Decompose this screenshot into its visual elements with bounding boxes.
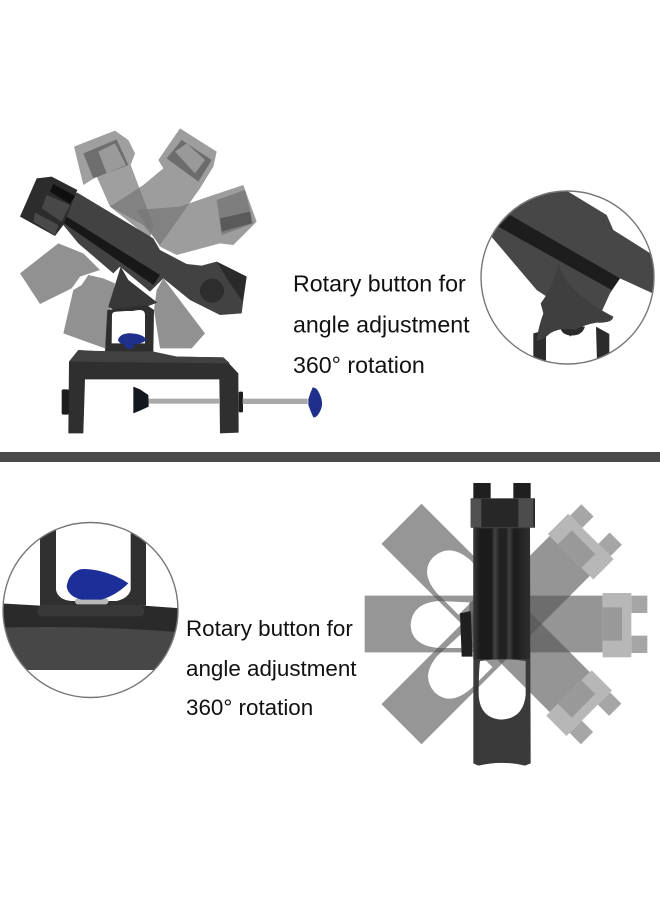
figure: tube rotating — [365, 483, 647, 766]
ghost tubes — [365, 502, 647, 748]
caption: bottom — [186, 616, 357, 720]
ghost arms: rotation positions — [20, 128, 257, 348]
caption: top: 360° rotation — [293, 352, 425, 378]
caption: bottom: Rotary button for — [186, 616, 353, 641]
divider bar — [0, 452, 660, 462]
caption: top — [293, 270, 470, 378]
caption: bottom: 360° rotation — [186, 695, 313, 720]
blue screw handle — [308, 387, 322, 417]
caption: top: angle adjustment — [293, 312, 470, 338]
detail lens: pivot close-up — [481, 187, 660, 373]
infographic page — [0, 128, 660, 766]
clamp body — [62, 350, 243, 433]
caption: top: Rotary button for — [293, 270, 466, 296]
rotary knob bracket — [105, 267, 157, 352]
threaded clamp screw — [133, 387, 308, 413]
figure: rod holder rotating on clamp — [20, 128, 322, 433]
detail lens: blue knob close-up — [0, 522, 180, 698]
main tube — [471, 483, 535, 766]
caption: bottom: angle adjustment — [186, 656, 357, 681]
rod holder arm — [20, 177, 247, 315]
side knob — [460, 611, 473, 657]
blue rotary knob — [118, 333, 147, 349]
